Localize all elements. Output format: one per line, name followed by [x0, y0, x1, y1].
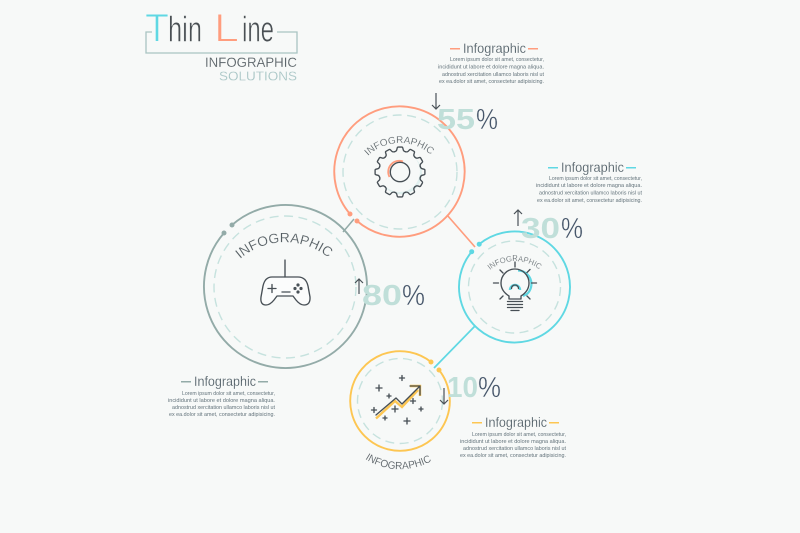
panel: grey circle, gamepad 80% [203, 204, 368, 369]
grey dashed ring [214, 216, 356, 358]
title: L [214, 6, 239, 50]
value: 30%: 30 [521, 213, 560, 245]
body text: ex ea.dolor sit amet, consectetur adipisicing. [439, 79, 544, 85]
heading: Infographic [485, 414, 547, 430]
cyan ring [459, 231, 570, 342]
icon: light bulb [494, 262, 536, 310]
orange dashed ring [343, 115, 457, 229]
value: 80% [362, 280, 425, 312]
yellow ring [350, 351, 450, 451]
body text [460, 432, 567, 459]
body text: incididunt ut labore et dolore magna aliqua. [536, 183, 642, 189]
logo frame [146, 32, 297, 53]
title [145, 6, 274, 50]
value: 55% [437, 104, 498, 136]
logo subtitle: INFOGRAPHIC [205, 54, 297, 70]
body text: Lorem ipsum dolor sit amet, consectetur, [182, 391, 275, 397]
value: 10% [447, 372, 501, 404]
panel: yellow circle, chart 10% [349, 350, 451, 470]
value: 30% [521, 213, 583, 245]
value: 55%: % [476, 104, 498, 136]
body text: Lorem ipsum dolor sit amet, consectetur, [549, 176, 642, 182]
title: ine [242, 8, 274, 50]
panel: cyan circle, bulb 30% [458, 230, 571, 344]
arrow: up at 30% [514, 210, 522, 226]
body text: incididunt ut labore et dolore magna aliqua. [168, 398, 275, 404]
orange ring dots [348, 212, 360, 224]
text block: top orange [438, 40, 545, 85]
grey curved label: INFOGRAPHIC [235, 233, 332, 258]
title: T [145, 6, 169, 50]
grey ring [204, 205, 367, 368]
body text: incididunt ut labore et dolore magna aliqua. [438, 64, 544, 70]
arrow: up at 80% [355, 279, 363, 294]
body text [438, 57, 545, 85]
body text [536, 176, 643, 204]
body text: adnostrud xercitation ullamco laboris nisl ut [172, 405, 276, 411]
body text: adnostrud xercitation ullamco laboris nisl ut [442, 72, 545, 78]
heading: Infographic [561, 159, 624, 175]
cyan dashed ring [468, 241, 560, 333]
value: 10%: % [478, 372, 501, 404]
orange ring [334, 106, 465, 237]
body text: ex ea.dolor sit amet, consectetur adipisicing. [537, 198, 642, 204]
yellow ring dots [428, 360, 442, 372]
body text [168, 391, 276, 418]
title: hin [168, 8, 202, 50]
connector: orange to cyan [447, 215, 475, 247]
yellow curved label: INFOGRAPHIC [366, 453, 431, 470]
icon: rising chart with sparks [372, 376, 423, 424]
arrow: down at 55% [432, 93, 440, 109]
connector: cyan to yellow [434, 326, 475, 368]
value: 30%: % [561, 213, 583, 245]
text block: right cyan [536, 159, 643, 204]
icon: gear [375, 147, 425, 197]
text block: lower left grey [168, 373, 276, 418]
logo subtitle [205, 54, 297, 84]
logo subtitle: SOLUTIONS [219, 68, 297, 84]
value: 55%: 55 [437, 104, 475, 136]
panel: orange circle, gear 55% [333, 105, 466, 238]
orange curved label: INFOGRAPHIC [364, 136, 434, 156]
body text: ex ea.dolor sit amet, consectetur adipisicing. [169, 412, 275, 418]
grey ring dots [222, 222, 234, 236]
body text: Lorem ipsum dolor sit amet, consectetur, [450, 57, 544, 63]
body text: Lorem ipsum dolor sit amet, consectetur, [472, 432, 566, 438]
cyan curved label: INFOGRAPHIC [487, 255, 542, 270]
body text: ex ea.dolor sit amet, consectetur adipisicing. [460, 453, 566, 459]
body text: incididunt ut labore et dolore magna aliqua. [460, 439, 566, 445]
value: 80%: 80 [362, 280, 402, 312]
text block: lower right yellow [460, 414, 567, 459]
heading: Infographic [463, 40, 526, 56]
body text: adnostrud xercitation ullamco laboris nisl ut [539, 190, 643, 196]
arrow: down at 10% [440, 388, 448, 404]
heading: Infographic [194, 373, 256, 389]
value: 10%: 10 [447, 372, 478, 404]
value: 80%: % [402, 280, 425, 312]
cyan ring dots [469, 242, 482, 254]
connector: grey to orange [343, 219, 354, 232]
icon: gamepad [261, 260, 310, 305]
logo: Thin Line Infographic Solutions [145, 6, 297, 84]
body text: adnostrud xercitation ullamco laboris nisl ut [463, 446, 567, 452]
yellow dashed ring [358, 358, 442, 444]
